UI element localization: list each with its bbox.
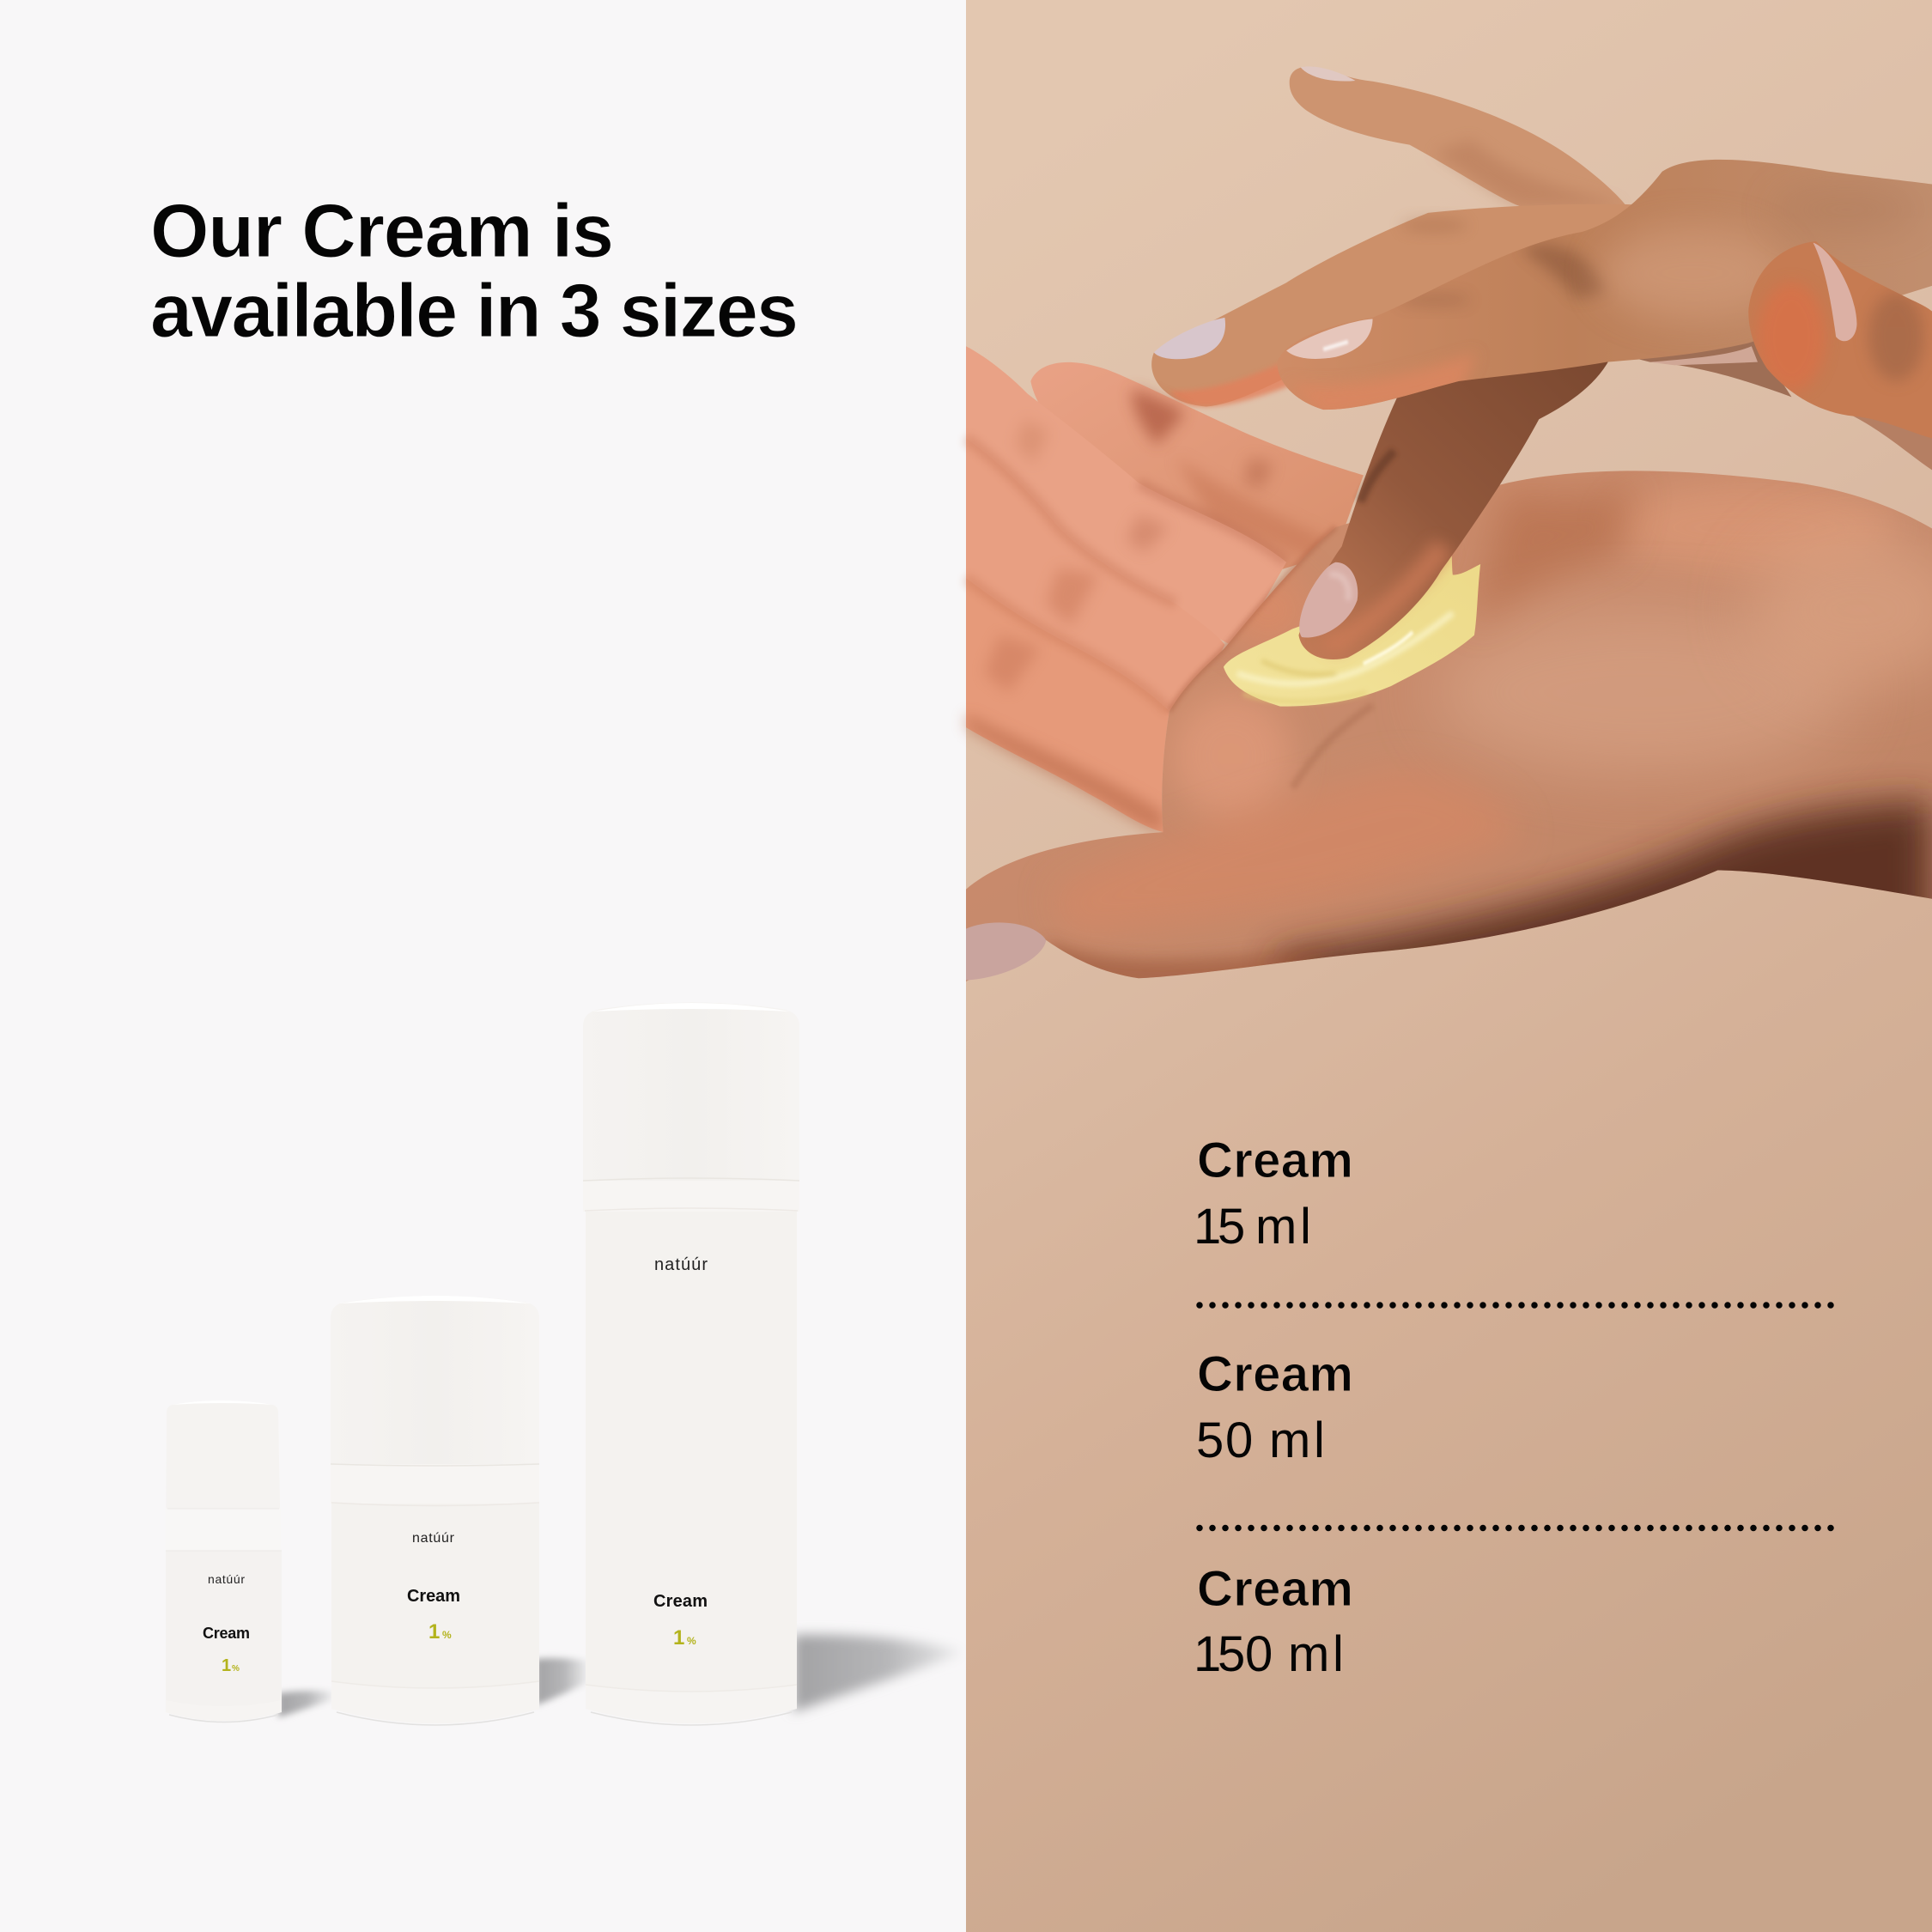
thumb light — [1075, 781, 1499, 922]
lower hand: palm and thumb — [966, 471, 1932, 997]
bottle: large 150 ml — [583, 1003, 799, 1725]
upper hand: thumb — [1748, 241, 1932, 438]
nail — [1814, 243, 1857, 341]
lower hand: finger one — [966, 578, 1170, 832]
photo: hands with cream — [966, 66, 1932, 997]
item: 50 ml: Cream — [1197, 1346, 1353, 1402]
item: 150 ml: Cream — [1197, 1561, 1353, 1617]
palm shadow right of finger — [1478, 486, 1638, 613]
right panel background — [966, 0, 1932, 1932]
cream on palm — [1224, 537, 1480, 707]
item: 15 ml — [1194, 1133, 1353, 1255]
nail — [1299, 562, 1358, 638]
item: 50 ml: 50 ml — [1196, 1413, 1325, 1468]
label: 1 percent: % — [442, 1629, 452, 1641]
title — [150, 188, 799, 353]
lower hand: finger three — [966, 346, 1286, 648]
bottle: small 15 ml — [166, 1400, 282, 1722]
upper hand: ring finger — [1290, 66, 1625, 206]
label: 1 percent: % — [232, 1664, 240, 1674]
label: natuur: natúúr — [654, 1255, 708, 1274]
product group: three cream bottles — [166, 1003, 963, 1725]
nail — [1286, 319, 1373, 359]
upper hand: back and index finger — [1277, 160, 1932, 419]
lower hand: finger four — [1030, 362, 1364, 572]
label: Cream: Cream — [653, 1592, 708, 1611]
label: Cream: Cream — [407, 1587, 460, 1606]
label: 1 percent: 1 — [673, 1626, 684, 1649]
cast shadows — [278, 1635, 963, 1717]
label: 1 percent: % — [687, 1635, 696, 1647]
left panel background — [0, 0, 966, 1932]
label: 1 percent: 1 — [428, 1620, 440, 1643]
nail — [1154, 318, 1225, 359]
item: 15 ml: Cream — [1197, 1133, 1353, 1188]
title: available in 3 sizes — [150, 268, 799, 353]
palm light — [1632, 484, 1880, 570]
label: natuur: natúúr — [208, 1572, 245, 1586]
label: natuur: natúúr — [412, 1531, 455, 1546]
title: Our Cream is — [150, 188, 614, 273]
item: 150 ml — [1194, 1561, 1353, 1682]
lower hand: finger two — [966, 438, 1224, 718]
item: 50 ml — [1196, 1346, 1353, 1468]
palm edge crease — [1170, 527, 1336, 712]
upper hand: pressing finger — [1298, 359, 1610, 659]
upper hand: second finger — [1151, 204, 1634, 406]
item: 150 ml: 150 ml — [1194, 1626, 1344, 1682]
label: 1 percent — [222, 1656, 240, 1675]
upper hand: palm underside — [1637, 340, 1932, 470]
label: 1 percent — [428, 1620, 452, 1643]
divider: dotted — [1200, 1525, 1835, 1531]
label: 1 percent — [673, 1626, 696, 1649]
label: 1 percent: 1 — [222, 1656, 231, 1675]
thumb nail — [966, 922, 1046, 981]
bottle: medium 50 ml — [331, 1296, 539, 1725]
divider: dotted — [1200, 1302, 1835, 1309]
wrist shadow — [1274, 800, 1932, 997]
item: 15 ml: 15 ml — [1194, 1199, 1311, 1255]
size list — [1194, 1133, 1835, 1682]
label: Cream: Cream — [203, 1625, 250, 1642]
